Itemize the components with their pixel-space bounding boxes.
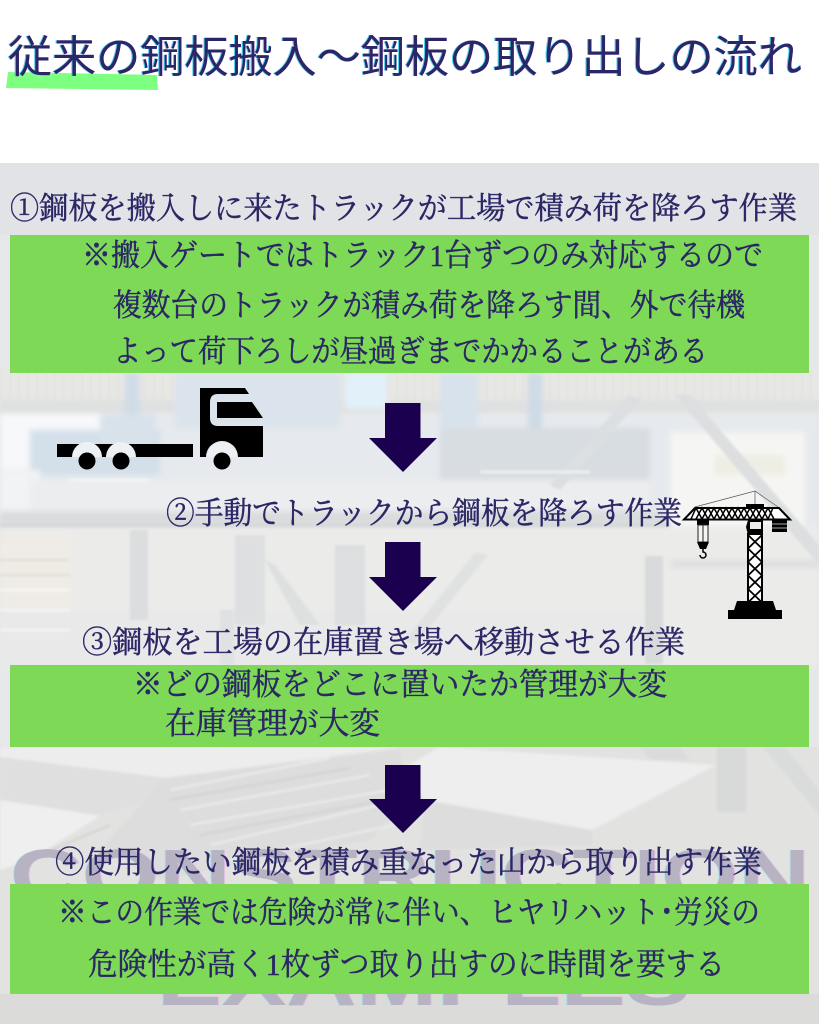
step 2 heading: ②手動でトラックから鋼板を降ろす作業: [166, 496, 682, 531]
panel: step 1 note: よって荷下ろしが昼過ぎまでかかることがある: [113, 334, 708, 369]
icon: truck: [57, 388, 263, 470]
panel: step 3 note: 在庫管理が大変: [165, 706, 380, 741]
panel: step 4 note: [10, 884, 809, 994]
panel: step 1 note: 複数台のトラックが積み荷を降ろす間、外で待機: [113, 288, 746, 323]
arrow 2: [369, 542, 437, 611]
ghost text: background wordmark: [10, 836, 810, 1021]
step 3 heading: ③鋼板を工場の在庫置き場へ移動させる作業: [82, 625, 685, 660]
panel: step 1 note: [10, 235, 809, 373]
arrow 1: [369, 403, 437, 472]
panel: step 3 note: ※どの鋼板をどこに置いたか管理が大変: [133, 667, 667, 702]
ghost text: background wordmark: EXAMPLES: [157, 941, 690, 1021]
icon: tower crane: [684, 491, 790, 619]
ghost text: background wordmark: CONSTRUCTION: [10, 836, 810, 916]
panel: step 4 note: 危険性が高く1枚ずつ取り出すのに時間を要する: [88, 947, 725, 982]
plates area: [0, 747, 819, 1024]
panel: step 4 note: ※この作業では危険が常に伴い、ヒヤリハット･労災の: [58, 895, 760, 930]
panel: step 3 note: [10, 665, 809, 747]
arrow 3: [369, 765, 437, 833]
panel: step 1 note: ※搬入ゲートではトラック1台ずつのみ対応するので: [82, 238, 763, 273]
title highlight: [6, 72, 158, 90]
step 4 heading: ④使用したい鋼板を積み重なった山から取り出す作業: [55, 845, 762, 880]
title: 従来の鋼板搬入～鋼板の取り出しの流れ: [8, 33, 802, 82]
